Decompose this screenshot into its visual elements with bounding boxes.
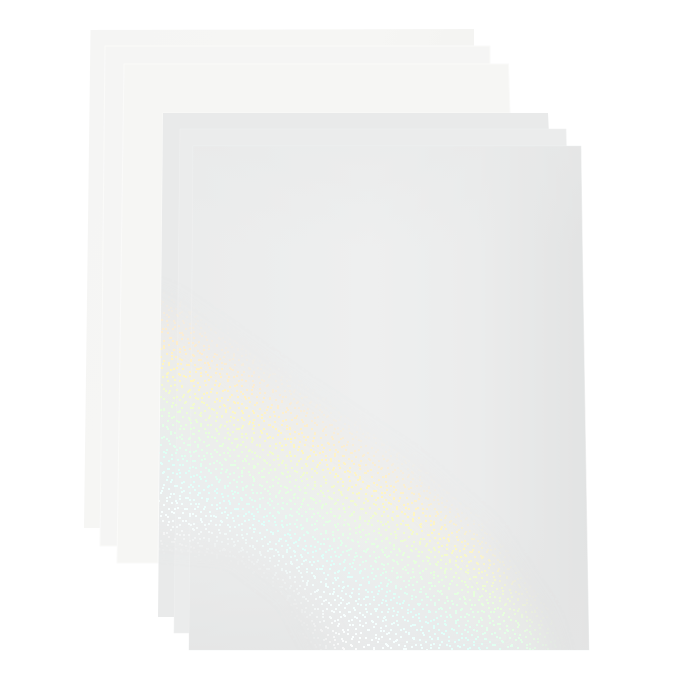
holographic dots [159, 310, 544, 650]
illustration: stack of holographic sheets [84, 29, 590, 650]
front sheet 6 [189, 146, 589, 650]
front sheet 4 [158, 113, 575, 617]
back sheet 2 [100, 46, 490, 546]
rainbow glow [150, 260, 590, 660]
back sheet 3 [117, 64, 510, 563]
holographic rainbow pattern [159, 309, 548, 650]
front sheet 6 shading [189, 146, 589, 650]
front sheets [158, 113, 589, 650]
back sheets [84, 29, 510, 563]
front sheet 5 [174, 129, 585, 633]
back sheet 1 [84, 29, 474, 528]
